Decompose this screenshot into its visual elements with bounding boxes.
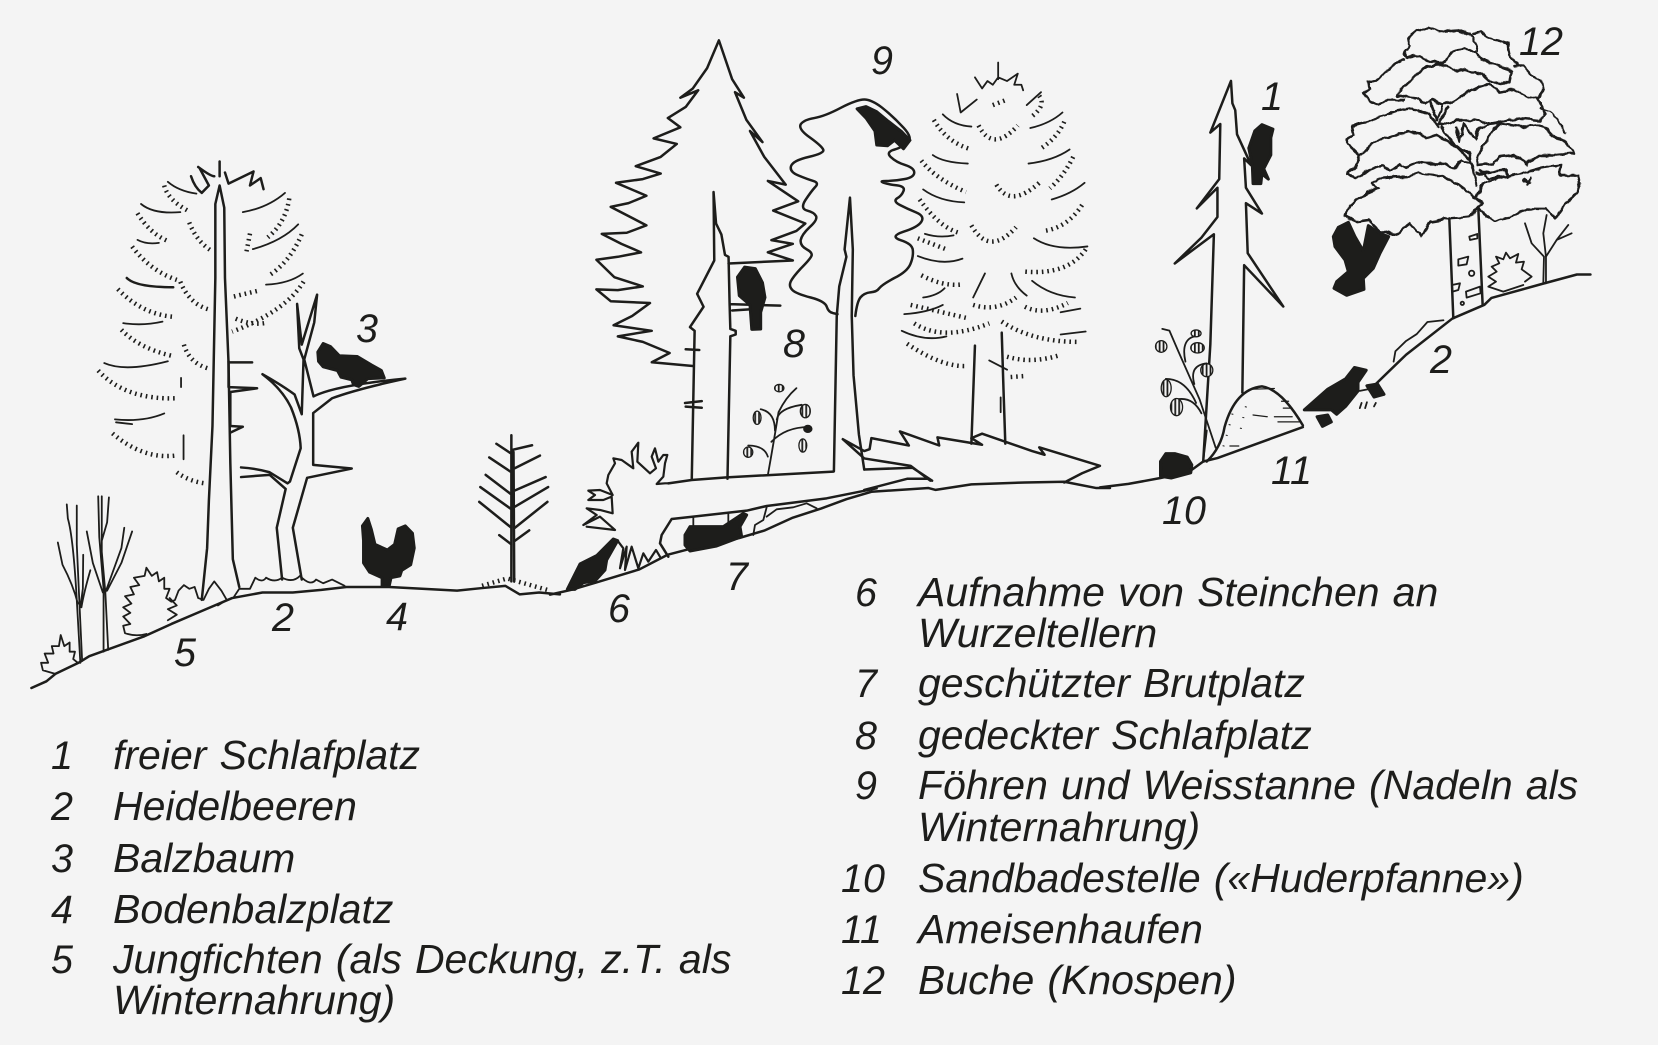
legend: left column: 3: [51, 837, 73, 881]
legend: right column: Buche (Knospen): [918, 957, 1237, 1003]
fallen tree crown and upper trunk edge: [843, 431, 1100, 490]
legend: right column: 7: [855, 662, 879, 706]
beech canopy: [1345, 27, 1580, 237]
legend: right column: 8: [855, 714, 877, 758]
bilberry plant: [1156, 329, 1216, 461]
legend: left column: freier Schlafplatz: [113, 732, 420, 778]
fir with hatching: [902, 63, 1087, 444]
pine crown outline: [790, 100, 922, 316]
saplings: [58, 496, 132, 663]
illustration: middle section of forest slope: [550, 40, 1110, 595]
diagram number labels: 10: [1162, 489, 1206, 533]
heather on slope: [1394, 320, 1443, 362]
young spruce: [479, 435, 548, 581]
legend: right column: geschützter Brutplatz: [918, 660, 1305, 706]
legend: left column: Bodenbalzplatz: [113, 886, 393, 932]
ground line middle: [550, 482, 1110, 595]
legend: right column: Föhren und Weisstanne (Nadeln als: [918, 762, 1578, 808]
illustration: right section of forest slope: [1100, 81, 1590, 487]
legend: left column: 4: [51, 888, 73, 932]
illustration: left section of forest slope: [31, 161, 560, 688]
legend: right column: Aufnahme von Steinchen an: [915, 569, 1438, 615]
legend: right column: [841, 569, 1578, 1003]
root plate: [583, 443, 668, 570]
ground line right: [1100, 274, 1590, 487]
legend: right column: 9: [855, 764, 877, 808]
legend: left column: 5: [51, 938, 74, 982]
fallen trunk edges: [660, 472, 877, 557]
spruce outline: [596, 40, 805, 366]
grass at young spruce: [482, 578, 550, 591]
pine trunk: [834, 198, 864, 471]
undergrowth below trunk: [693, 503, 817, 535]
anthill: [1207, 386, 1303, 461]
beech trunk: [1449, 208, 1483, 318]
diagram number labels: 7: [726, 555, 750, 599]
diagram number labels: 6: [608, 587, 630, 631]
walking bird feeding on berries: [1304, 367, 1384, 426]
large larch tree: [98, 161, 304, 600]
legend: left column: Winternahrung): [113, 977, 395, 1023]
legend: right column: 12: [841, 959, 885, 1003]
young spruce bushes: [41, 568, 227, 674]
legend: right column: Sandbadestelle («Huderpfanne»): [918, 855, 1524, 901]
diagram number labels: 8: [783, 322, 805, 366]
legend: right column: 10: [841, 857, 885, 901]
legend: right column: Winternahrung): [918, 804, 1200, 850]
legend: left column: Balzbaum: [113, 835, 295, 881]
bird on balzbaum: [318, 343, 384, 386]
bird at root plate: [567, 539, 618, 589]
brooding bird: [685, 513, 747, 551]
ground line left: [31, 586, 560, 688]
legend: right column: 6: [855, 571, 877, 615]
beech group: [1333, 27, 1580, 318]
legend: left column: 2: [50, 785, 73, 829]
legend: left column: Heidelbeeren: [113, 783, 357, 829]
diagram number labels: 3: [356, 307, 378, 351]
diagram number labels: 4: [386, 595, 408, 639]
bird in cover: [737, 267, 765, 329]
balzbaum dead tree: [241, 295, 405, 580]
displaying bird on ground: [362, 518, 414, 586]
legend: right column: 11: [841, 908, 882, 952]
diagram number labels: 9: [871, 39, 893, 83]
bird in flight: [1333, 222, 1389, 295]
bird on pine: [857, 107, 910, 149]
diagram number labels: 2: [1429, 338, 1452, 382]
diagram number labels: [174, 20, 1563, 675]
sleeping tree: [1175, 81, 1283, 461]
legend: right column: Ameisenhaufen: [915, 906, 1203, 952]
diagram number labels: 12: [1519, 20, 1563, 64]
small sapling under beech: [1525, 215, 1572, 283]
legend: left column: Jungfichten (als Deckung, z.T. als: [112, 936, 731, 982]
fallen tree, root plate and birds: [567, 443, 877, 589]
diagram number labels: 2: [271, 596, 294, 640]
legend: left column: 1: [51, 734, 73, 778]
diagram number labels: 11: [1271, 449, 1312, 493]
bird on tree: [1249, 125, 1273, 184]
diagram number labels: 5: [174, 631, 197, 675]
legend: left column: [50, 732, 731, 1023]
heather: [234, 576, 345, 597]
diagram number labels: 1: [1261, 75, 1283, 119]
legend: right column: Wurzeltellern: [918, 610, 1157, 656]
bush under beech: [1488, 253, 1532, 292]
bilberry plant: [744, 384, 811, 475]
bird in sand bath: [1161, 454, 1192, 478]
dead spruce trunk: [685, 192, 780, 479]
legend: right column: gedeckter Schlafplatz: [918, 712, 1312, 758]
